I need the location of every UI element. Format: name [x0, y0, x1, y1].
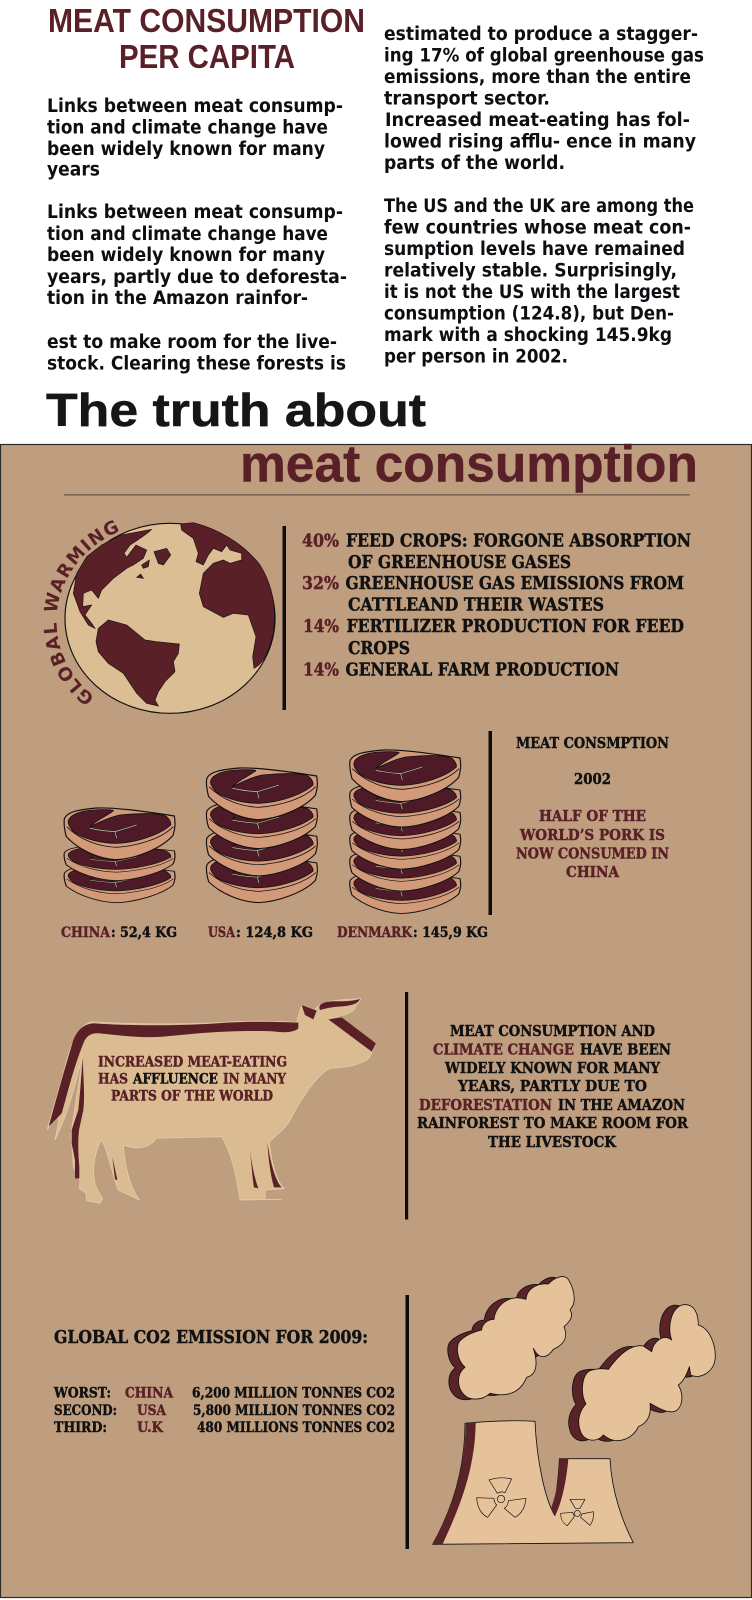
- heading: meat consumption: meat consumption: [240, 436, 698, 494]
- text block: right column: relatively stable. Surprisingly,: [384, 260, 677, 282]
- text block: right column: transport sector.: [384, 88, 550, 110]
- text block: left column: [47, 96, 347, 374]
- text block: meat consumption 2002: [516, 734, 669, 881]
- text block: left column: been widely known for many: [47, 245, 325, 266]
- icon: smoke clouds and cooling towers: [433, 1277, 715, 1544]
- icon: denmark steak stack: [350, 750, 461, 914]
- labels: consumption by country: : 145,9 KG: [413, 925, 488, 941]
- text block: left column: tion and climate change have: [47, 118, 328, 138]
- text block: climate change and deforestation: THE LIVESTOCK: [488, 1133, 617, 1151]
- text block: left column: Links between meat consump-: [47, 202, 343, 223]
- labels: consumption by country: USA: [208, 925, 236, 941]
- text block: global co2 emission for 2009: 480 MILLIONS TONNES CO2: [197, 1420, 395, 1436]
- panel: tan infographic background: [0, 444, 752, 1598]
- labels: consumption by country: DENMARK: [337, 925, 413, 941]
- text block: left column: years: [47, 160, 100, 180]
- text block: left column: Links between meat consump-: [47, 96, 343, 117]
- list: greenhouse gas sources: CROPS: [348, 638, 410, 659]
- list: greenhouse gas sources: GENERAL FARM PRODUCTION: [346, 660, 619, 680]
- text block: climate change and deforestation: CLIMATE CHANGE: [433, 1040, 574, 1058]
- icon: cow silhouette: [47, 999, 376, 1203]
- text block: climate change and deforestation: IN THE AMAZON: [558, 1096, 685, 1114]
- list: greenhouse gas sources: 32%: [302, 573, 339, 594]
- text block: climate change and deforestation: HAVE BEEN: [580, 1040, 671, 1058]
- text block: right column: The US and the UK are among the: [384, 196, 694, 217]
- text block: climate change and deforestation: DEFORESTATION: [419, 1096, 552, 1114]
- icon: globe with continents: [65, 523, 275, 713]
- text block: right column: it is not the US with the largest: [384, 282, 680, 303]
- text on cow: increased meat-eating: INCREASED MEAT-EATING: [98, 1054, 287, 1070]
- text block: right column: Increased meat-eating has fol-: [385, 110, 690, 131]
- text block: right column: [384, 24, 704, 368]
- list: greenhouse gas sources: CATTLEAND THEIR WASTES: [348, 594, 604, 616]
- text block: meat consumption 2002: WORLD’S PORK IS: [519, 826, 665, 844]
- text block: right column: ing 17% of global greenhouse gas: [384, 46, 704, 66]
- text block: climate change and deforestation: RAINFOREST TO MAKE ROOM FOR: [417, 1114, 688, 1132]
- text block: right column: emissions, more than the entire: [384, 67, 691, 88]
- text block: global co2 emission for 2009: CHINA: [125, 1386, 173, 1402]
- text block: left column: been widely known for many: [47, 139, 325, 160]
- text block: global co2 emission for 2009: USA: [137, 1403, 166, 1419]
- text block: global co2 emission for 2009: 5,800 MILLION TONNES CO2: [193, 1403, 395, 1419]
- icon: usa steak stack: [206, 768, 317, 903]
- heading: the truth about: The truth about: [46, 384, 426, 436]
- text block: right column: mark with a shocking 145.9kg: [384, 325, 672, 346]
- curved label: global warming: GLOBAL WARMING: [44, 520, 118, 704]
- text block: left column: est to make room for the live-: [47, 332, 337, 353]
- page heading: meat consumption per capita: MEAT CONSUMPTION: [48, 2, 365, 39]
- text block: right column: estimated to produce a stagger-: [384, 24, 698, 45]
- text block: global co2 emission for 2009: GLOBAL CO2 EMISSION FOR 2009:: [54, 1327, 368, 1348]
- text block: right column: consumption (124.8), but Den-: [384, 304, 674, 324]
- text block: global co2 emission for 2009: THIRD:: [54, 1420, 107, 1436]
- text block: climate change and deforestation: MEAT CONSUMPTION AND: [450, 1022, 655, 1040]
- text block: meat consumption 2002: NOW CONSUMED IN: [516, 844, 669, 862]
- list: greenhouse gas sources: FERTILIZER PRODUCTION FOR FEED: [346, 616, 684, 637]
- text on cow: increased meat-eating: PARTS OF THE WORLD: [111, 1088, 273, 1104]
- labels: consumption by country: [61, 925, 488, 941]
- text block: global co2 emission for 2009: WORST:: [53, 1386, 111, 1402]
- text block: right column: few countries whose meat con-: [384, 218, 691, 238]
- list: greenhouse gas sources: 14%: [303, 616, 339, 637]
- text block: left column: tion and climate change have: [47, 224, 328, 245]
- text block: global co2 emission for 2009: 6,200 MILLION TONNES CO2: [192, 1386, 395, 1402]
- page heading: meat consumption per capita: [48, 2, 365, 75]
- text block: climate change and deforestation: WIDELY KNOWN FOR MANY: [444, 1059, 660, 1077]
- labels: consumption by country: CHINA: [61, 925, 111, 941]
- text on cow: increased meat-eating: AFFLUENCE: [132, 1072, 218, 1088]
- text on cow: increased meat-eating: HAS: [98, 1072, 128, 1088]
- list: greenhouse gas sources: 14%: [303, 660, 339, 680]
- text block: meat consumption 2002: MEAT CONSMPTION: [516, 734, 669, 752]
- text block: global co2 emission for 2009: [53, 1327, 395, 1436]
- text block: meat consumption 2002: HALF OF THE: [539, 807, 646, 825]
- text block: right column: per person in 2002.: [384, 346, 568, 368]
- text block: global co2 emission for 2009: SECOND:: [54, 1403, 117, 1419]
- text on cow: increased meat-eating: [98, 1054, 287, 1104]
- labels: consumption by country: : 52,4 KG: [111, 925, 177, 941]
- text block: right column: lowed rising afflu- ence in many: [384, 132, 696, 152]
- text block: right column: sumption levels have remained: [384, 239, 685, 260]
- text block: climate change and deforestation: [417, 1022, 688, 1151]
- text block: meat consumption 2002: CHINA: [566, 863, 619, 881]
- list: greenhouse gas sources: OF GREENHOUSE GASES: [348, 552, 571, 573]
- list: greenhouse gas sources: [302, 530, 691, 680]
- text block: global co2 emission for 2009: U.K: [137, 1420, 164, 1436]
- text block: left column: stock. Clearing these forests is: [47, 354, 346, 374]
- text on cow: increased meat-eating: IN MANY: [223, 1072, 287, 1088]
- labels: consumption by country: : 124,8 KG: [236, 925, 313, 941]
- text block: meat consumption 2002: 2002: [574, 770, 611, 788]
- text block: left column: tion in the Amazon rainfor-: [47, 288, 308, 309]
- list: greenhouse gas sources: GREENHOUSE GAS EMISSIONS FROM: [346, 573, 684, 594]
- text block: right column: parts of the world.: [384, 153, 565, 174]
- text block: climate change and deforestation: YEARS, PARTLY DUE TO: [457, 1077, 647, 1095]
- icon: china steak stack: [64, 808, 175, 903]
- list: greenhouse gas sources: FEED CROPS: FORGONE ABSORPTION: [346, 530, 691, 552]
- list: greenhouse gas sources: 40%: [302, 530, 339, 552]
- page heading: meat consumption per capita: PER CAPITA: [119, 38, 295, 75]
- text block: left column: years, partly due to deforesta-: [47, 267, 347, 288]
